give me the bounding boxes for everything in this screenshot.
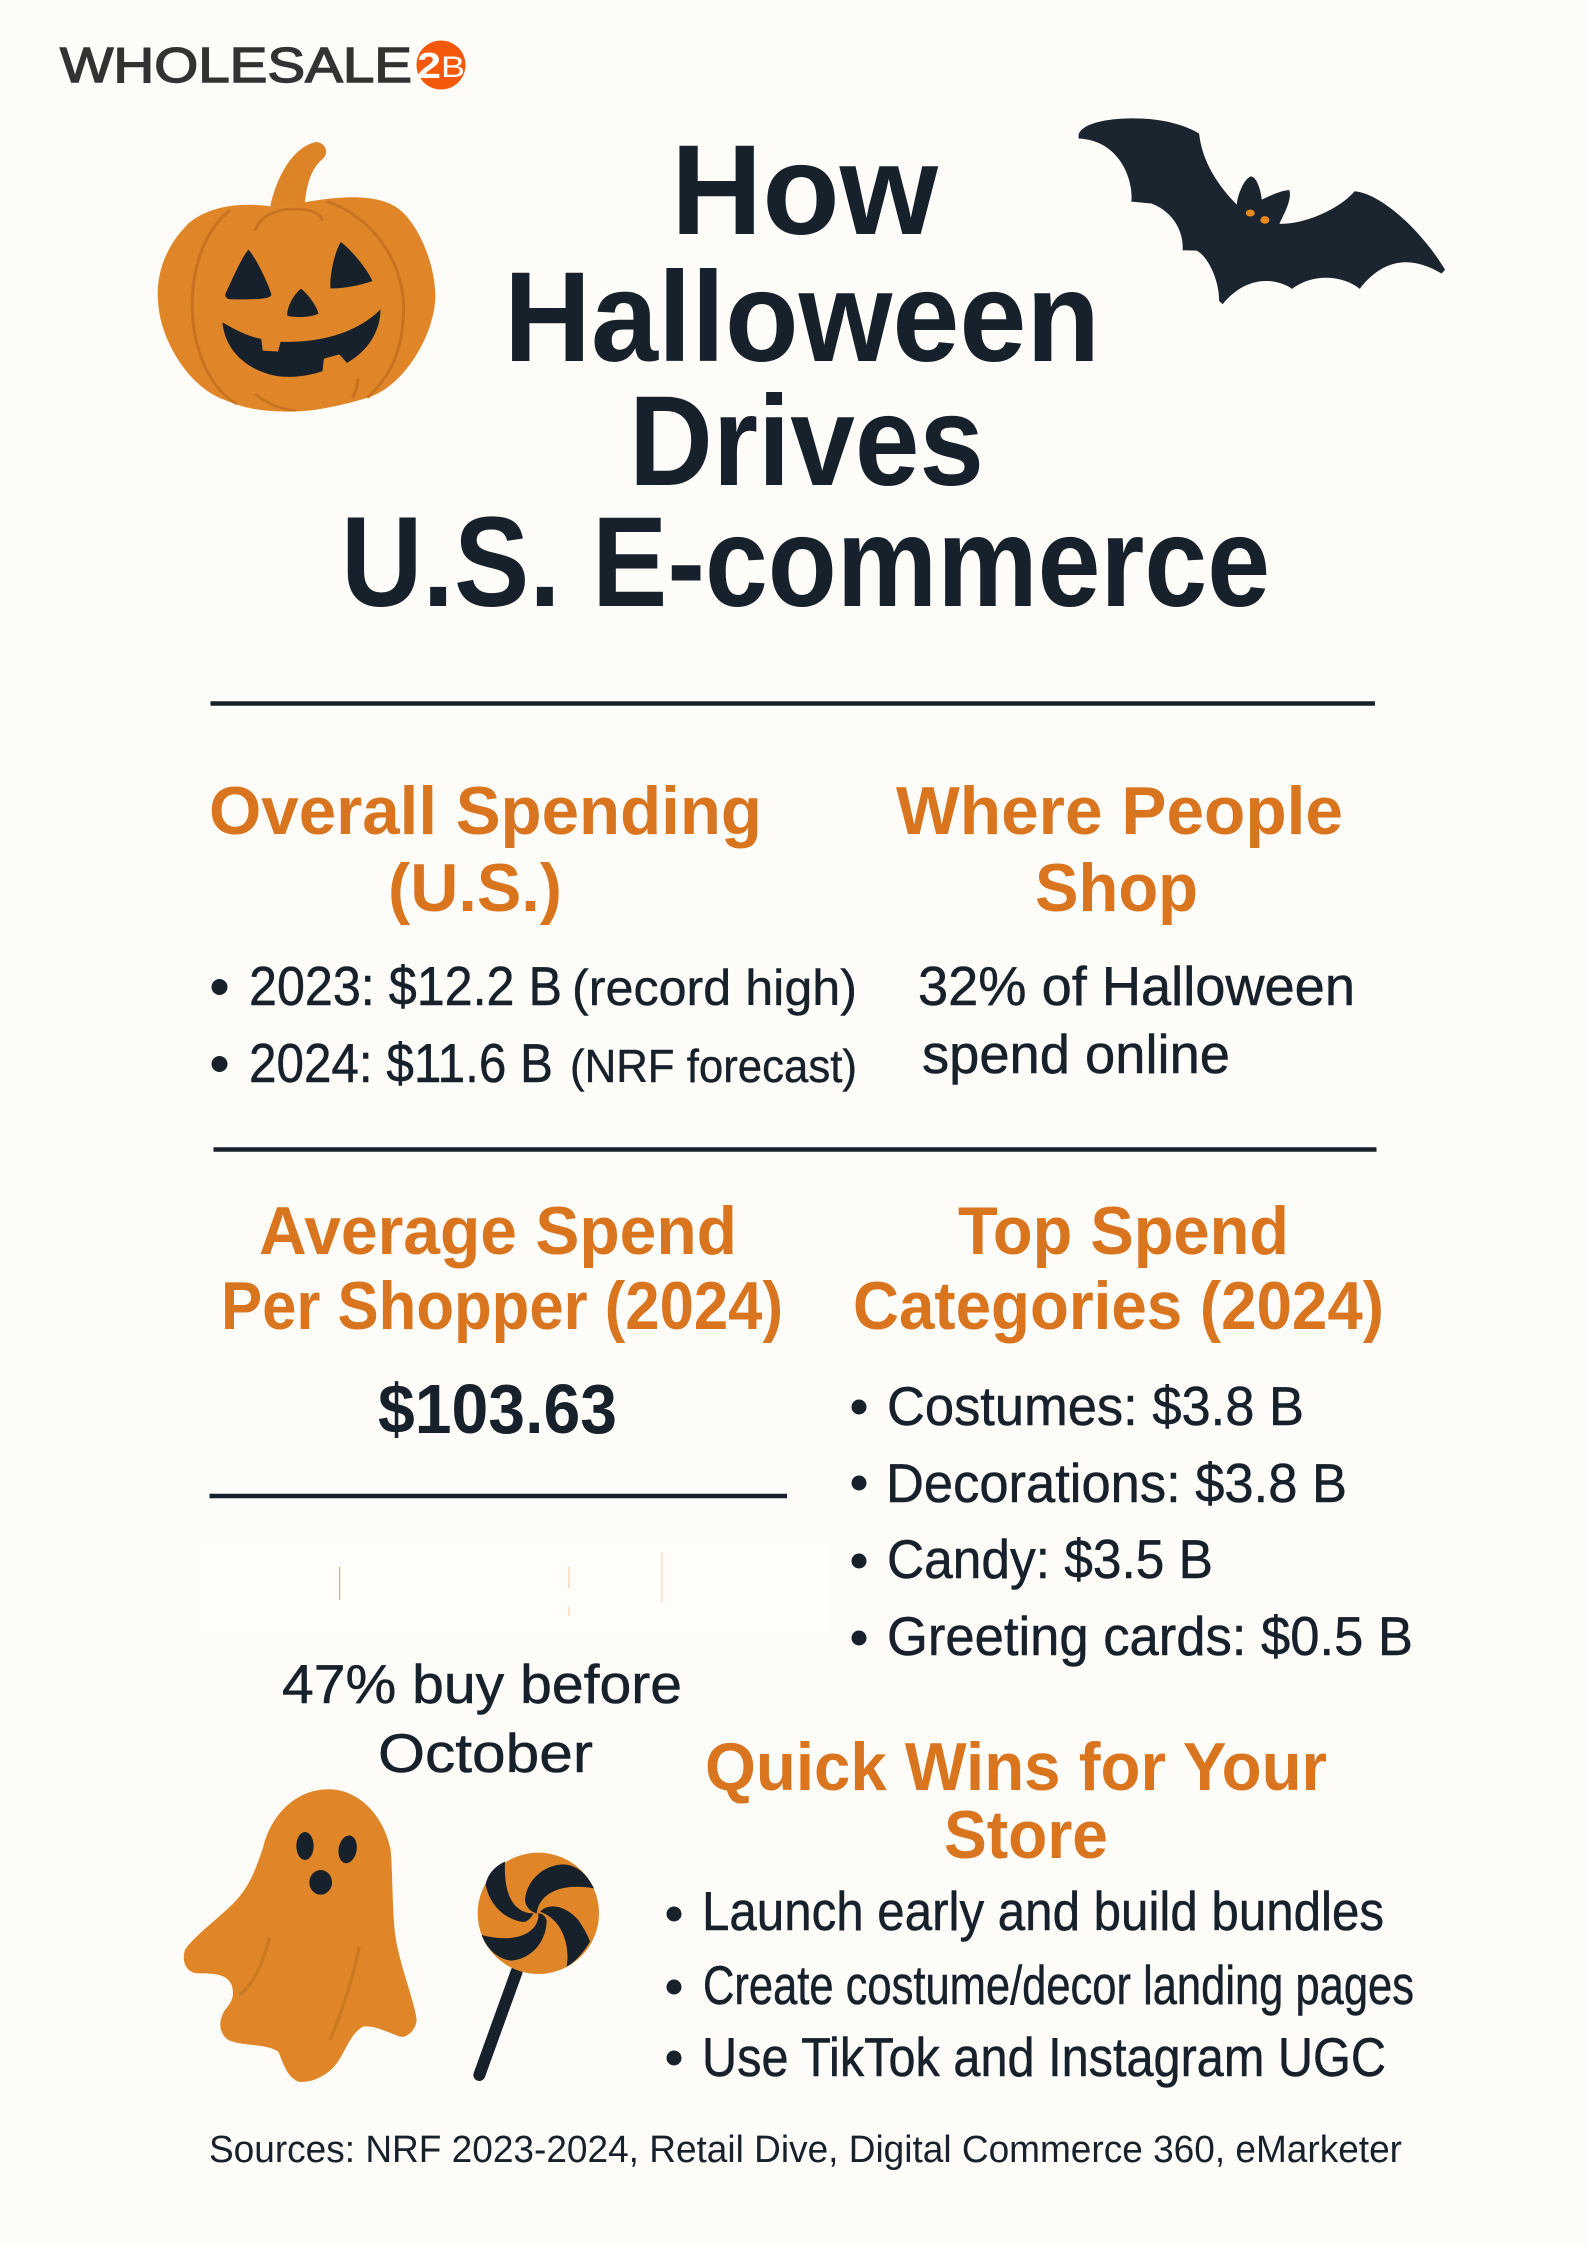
panel: quick wins: Store	[944, 1797, 1108, 1873]
heading: where people shop: Where People	[896, 773, 1343, 849]
panel: overall spending: (record high)	[572, 960, 857, 1016]
panel: top spend categories: Greeting cards: $0.5 B	[887, 1605, 1413, 1667]
panel: top spend categories	[852, 1193, 1413, 1667]
panel: average spend per shopper: Per Shopper (2024)	[221, 1268, 783, 1344]
panel: quick wins: Launch early and build bundles	[702, 1880, 1384, 1942]
icon: bat	[1079, 118, 1445, 304]
panel: overall spending: (NRF forecast)	[570, 1040, 857, 1092]
panel: where people shop	[896, 773, 1355, 1085]
icon: lollipop	[478, 1853, 599, 2075]
icon: jack-o-lantern pumpkin	[158, 142, 435, 412]
icon: ghost	[184, 1789, 417, 2082]
panel: overall spending	[209, 773, 857, 1094]
panel: top spend categories: Costumes: $3.8 B	[887, 1375, 1304, 1437]
title	[341, 119, 1270, 634]
heading: quick wins: Quick Wins for Your	[705, 1729, 1327, 1805]
logo: Wholesale2B: 2	[417, 45, 441, 86]
title: How	[671, 119, 938, 262]
panel: where people shop: 32% of Halloween	[918, 955, 1355, 1017]
title: Halloween	[504, 246, 1100, 389]
text block: buy before october: October	[378, 1722, 593, 1784]
panel: top spend categories: Categories (2024)	[853, 1268, 1384, 1344]
heading: top spend categories: Top Spend	[958, 1193, 1289, 1269]
logo: Wholesale2B: WHOLESALE	[60, 39, 412, 93]
panel: overall spending: 2024: $11.6 B	[249, 1032, 553, 1094]
panel: overall spending: (U.S.)	[388, 850, 562, 926]
panel: where people shop: spend online	[922, 1023, 1230, 1085]
panel: where people shop: Shop	[1035, 850, 1198, 926]
heading: average spend: Average Spend	[259, 1193, 737, 1269]
text block: buy before october	[282, 1653, 682, 1784]
panel: quick wins	[666, 1729, 1414, 2088]
panel: quick wins: Create costume/decor landing pages	[703, 1954, 1414, 2016]
heading: overall spending: Overall Spending	[209, 773, 762, 849]
logo: Wholesale2B: B	[441, 51, 465, 84]
panel: overall spending: 2023: $12.2 B	[249, 955, 562, 1017]
panel: quick wins: Use TikTok and Instagram UGC	[702, 2026, 1386, 2088]
sources: Sources: NRF 2023-2024, Retail Dive, Digital Commerce 360, eMarketer	[209, 2129, 1402, 2171]
panel: average spend per shopper	[221, 1193, 783, 1448]
panel: top spend categories: Candy: $3.5 B	[887, 1528, 1213, 1590]
panel: top spend categories: Decorations: $3.8 B	[886, 1452, 1347, 1514]
title: Drives	[629, 370, 984, 513]
title: U.S. E-commerce	[341, 491, 1270, 634]
panel: average spend per shopper: $103.63	[378, 1370, 617, 1448]
text block: buy before october: 47% buy before	[282, 1653, 682, 1715]
